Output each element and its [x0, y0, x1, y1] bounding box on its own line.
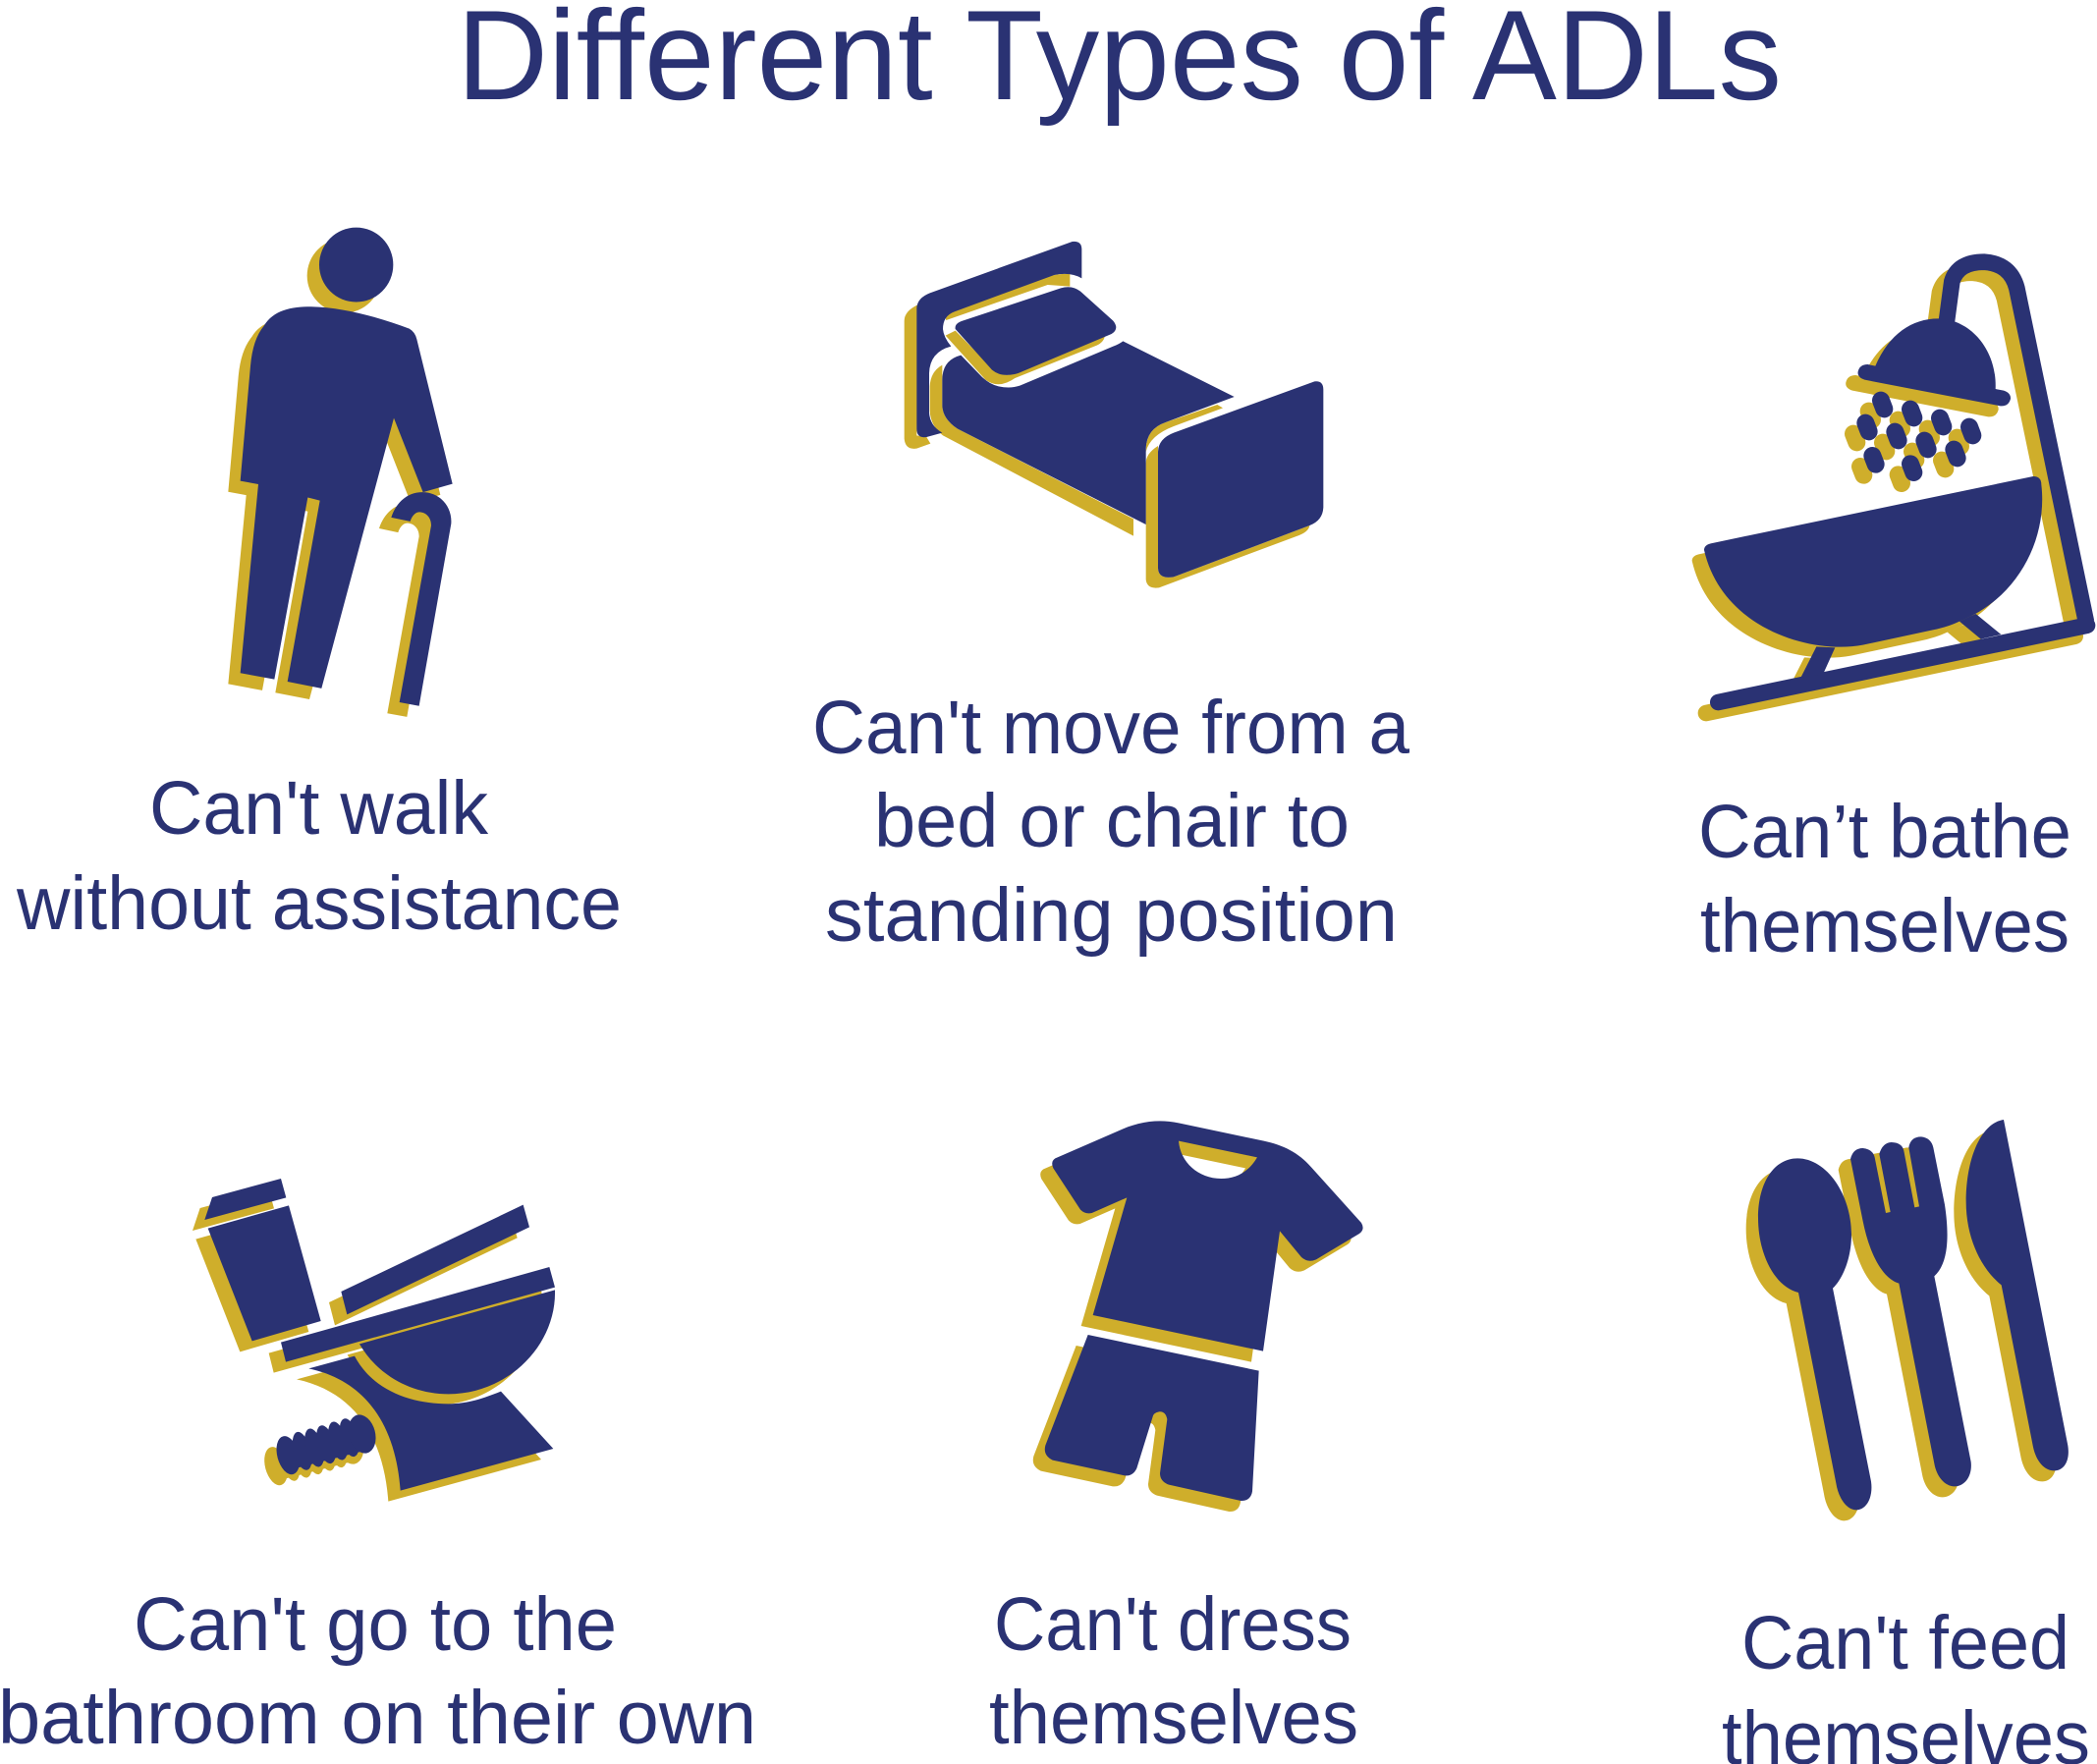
panel: toileting: [0, 1179, 756, 1760]
icon: spoon, fork and knife: [1746, 1120, 2069, 1520]
label: toileting: [0, 1582, 756, 1760]
label: walking: without assistance: [16, 861, 622, 946]
label: dressing: [989, 1582, 1358, 1760]
label: bathing: [1698, 790, 2071, 968]
label: walking: [16, 766, 622, 946]
panel: dressing: [989, 1121, 1363, 1760]
icon: toilet: [193, 1179, 555, 1502]
panel: walking: [16, 228, 622, 946]
icon: bed: [905, 242, 1323, 588]
label: dressing: themselves: [989, 1676, 1358, 1760]
label: transferring: Can't move from a: [812, 686, 1409, 770]
label: bathing: Can’t bathe: [1698, 790, 2071, 874]
label: dressing: Can't dress: [994, 1582, 1352, 1667]
label: toileting: bathroom on their own: [0, 1676, 756, 1760]
panel: transferring: [812, 242, 1409, 958]
label: transferring: standing position: [825, 873, 1398, 958]
label: toileting: Can't go to the: [134, 1582, 617, 1667]
icon: t-shirt and shorts: [1033, 1121, 1363, 1512]
label: eating: Can't feed: [1741, 1601, 2069, 1685]
panel: eating: [1722, 1120, 2090, 1764]
icon: person with cane: [228, 228, 453, 717]
label: walking: Can't walk: [149, 766, 488, 851]
icon: bathtub with shower: [1692, 262, 2087, 713]
label: bathing: themselves: [1700, 884, 2069, 968]
label: transferring: bed or chair to: [874, 779, 1350, 863]
label: eating: [1722, 1601, 2090, 1764]
label: transferring: [812, 686, 1409, 958]
panel: bathing: [1692, 262, 2087, 968]
